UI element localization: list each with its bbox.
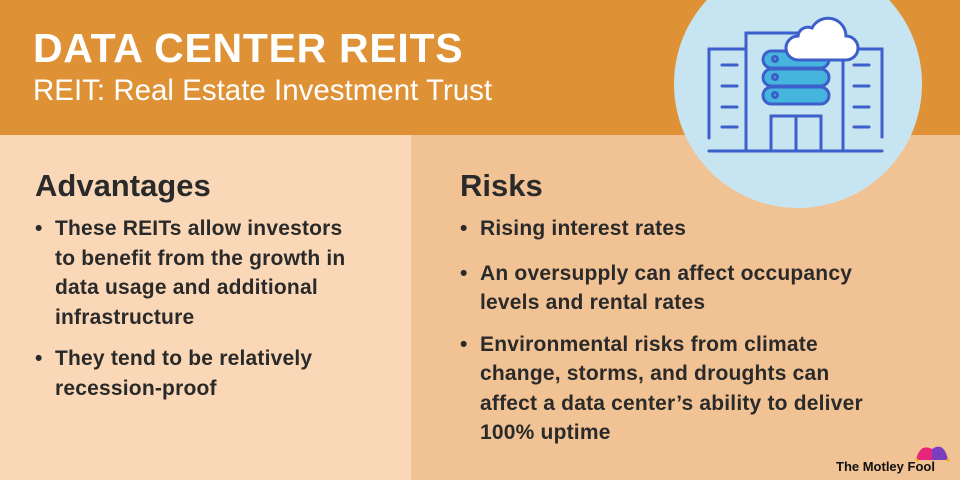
risks bullets: levels and rental rates <box>480 291 705 314</box>
risks bullets <box>460 217 863 444</box>
risks bullets: Rising interest rates <box>480 217 686 240</box>
risks bullets: 100% uptime <box>480 421 611 444</box>
subtitle: REIT: Real Estate Investment Trust <box>33 74 492 107</box>
advantages bullets: recession-proof <box>55 376 217 400</box>
header band <box>0 0 960 135</box>
title: DATA CENTER REITS <box>33 25 463 71</box>
advantages bullets: infrastructure <box>55 306 194 328</box>
advantages bullets: These REITs allow investors <box>55 217 342 240</box>
risks bullets: Environmental risks from climate <box>480 332 818 356</box>
heading: risks: Risks <box>460 168 543 203</box>
advantages bullets <box>36 217 345 400</box>
advantages bullets: to benefit from the growth in <box>55 246 345 270</box>
risks bullets: An oversupply can affect occupancy <box>480 262 852 284</box>
logo: The Motley Fool: The Motley Fool <box>836 459 935 474</box>
risks bullets: change, storms, and droughts can <box>480 362 829 385</box>
logo: The Motley Fool <box>836 446 950 474</box>
heading: advantages: Advantages <box>35 168 211 203</box>
advantages bullets: data usage and additional <box>55 276 318 299</box>
advantages bullets: They tend to be relatively <box>55 347 312 370</box>
panel: advantages <box>35 168 345 400</box>
panel: risks <box>460 168 863 444</box>
panel: advantages background <box>0 135 411 480</box>
risks bullets: affect a data center’s ability to deliver <box>480 392 863 414</box>
